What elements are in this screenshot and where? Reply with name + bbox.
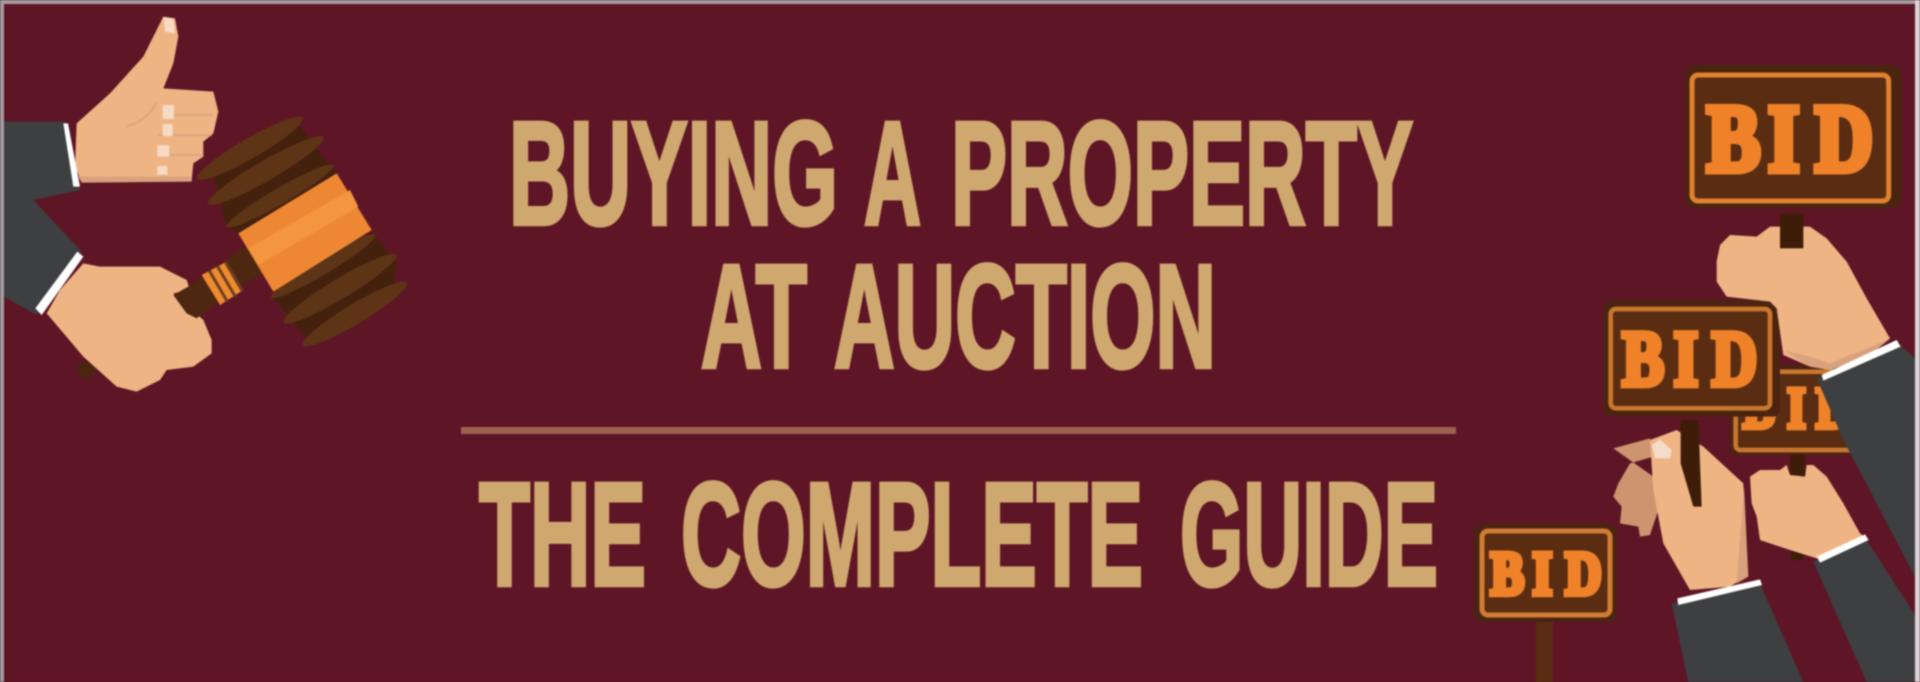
icon: hands with thumbs up and gavel	[4, 17, 412, 392]
gavel handle end	[77, 362, 95, 378]
title line 1	[509, 92, 1413, 256]
icon: bidding hands and paddles	[1474, 65, 1915, 682]
gavel	[173, 109, 412, 354]
gavel head rings	[192, 109, 412, 354]
back bid paddle: BID	[1743, 375, 1851, 440]
top paddle stick	[1780, 213, 1803, 248]
top bid hand	[1717, 227, 1890, 370]
gavel handle	[173, 245, 263, 318]
front bid paddle: BID	[1622, 317, 1757, 403]
gavel head orange	[238, 173, 372, 292]
small bid paddle: BID	[1491, 540, 1602, 608]
small bid paddle	[1474, 524, 1617, 682]
title line 2: AUCTION	[834, 235, 1216, 399]
upper sleeve	[4, 122, 80, 200]
gavel head dark core	[213, 127, 397, 340]
title	[461, 92, 1456, 617]
title line 1: PROPERTY	[951, 92, 1413, 256]
top paddle board	[1685, 65, 1902, 208]
fist hand	[47, 263, 212, 392]
top paddle board: BID	[1707, 86, 1873, 191]
front sleeve	[1672, 579, 1803, 682]
title line 1: A	[864, 92, 921, 256]
subtitle: THE	[479, 453, 646, 617]
back bid paddle	[1730, 365, 1869, 560]
gavel grip wrap	[202, 262, 243, 305]
front hand fingers	[1613, 438, 1658, 537]
subtitle: COMPLETE	[681, 453, 1143, 617]
divider	[461, 427, 1456, 434]
title line 1: BUYING	[509, 92, 838, 256]
back hand	[1750, 465, 1915, 682]
front bid paddle	[1603, 300, 1780, 417]
title line 2	[701, 235, 1216, 399]
thumbs up hand	[75, 17, 218, 183]
title line 2: AT	[701, 235, 807, 399]
subtitle: GUIDE	[1180, 453, 1438, 617]
lower sleeve	[4, 198, 83, 315]
front hand	[1650, 420, 1748, 590]
top sleeve	[1817, 340, 1915, 577]
